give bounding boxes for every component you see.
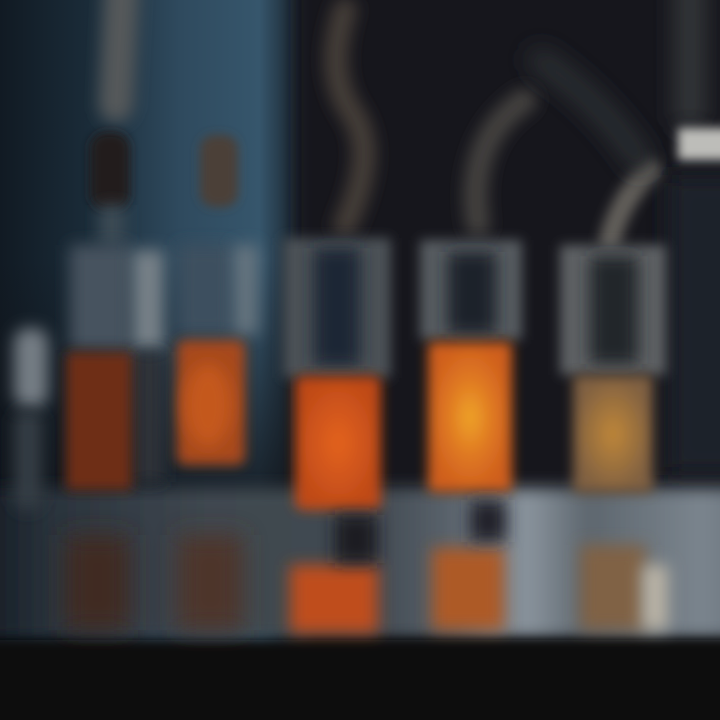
vial 4 [420, 240, 522, 630]
bottom dark band [0, 640, 720, 720]
vial 2 [177, 135, 258, 630]
light bar top right [678, 128, 720, 160]
vial 5 [560, 245, 668, 630]
vial 3 [283, 238, 391, 633]
floor surface [0, 488, 720, 638]
vial 1 [65, 132, 164, 630]
small vial far left [14, 328, 48, 510]
smoke wisps [116, 0, 690, 240]
